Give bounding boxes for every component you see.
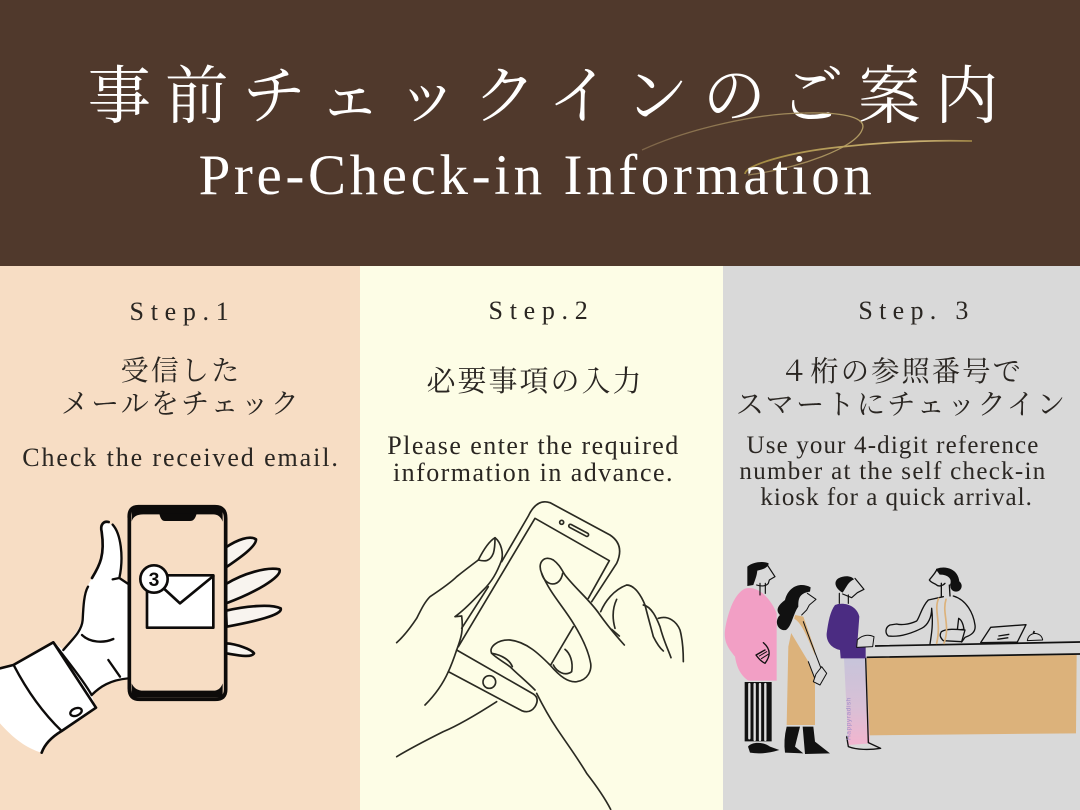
step 1 label: Step.1 (130, 297, 235, 326)
guest: woman in tan dress (777, 585, 830, 754)
header band (0, 0, 1080, 266)
step 3 Japanese heading (736, 349, 1067, 423)
step 3 label: Step. 3 (858, 296, 975, 325)
step 2 English text: information in advance. (393, 458, 674, 487)
title: Japanese: 事前チェックインのご案内 (88, 46, 1012, 137)
step 2 English text: Please enter the required (387, 431, 680, 460)
panel: step 1 (0, 266, 360, 810)
step 2 label: Step.2 (489, 296, 594, 325)
step 3 English text (739, 432, 1047, 511)
step 3 English text: number at the self check-in (739, 458, 1047, 485)
illustration: hands using smartphone line art (396, 501, 684, 810)
step 3 Japanese heading: スマートにチェックイン (736, 382, 1067, 423)
gold flourish (642, 112, 972, 176)
title: English: Pre-Check-in Information (199, 144, 875, 207)
laptop and desk bell (981, 625, 1043, 643)
step 2 English text (387, 431, 680, 487)
receptionist (886, 568, 975, 644)
reception counter (867, 642, 1080, 735)
panel: step 3 (723, 266, 1080, 810)
panel: step 2 (360, 266, 723, 810)
step 1 Japanese heading: メールをチェック (61, 382, 301, 422)
step 1 English text: Check the received email. (22, 443, 340, 472)
step 1 Japanese heading: 受信した (121, 349, 241, 389)
guest: man in purple (827, 576, 881, 749)
notification badge: 3 (149, 570, 160, 591)
notification badge (140, 565, 168, 593)
step 2 Japanese heading: 必要事項の入力 (426, 359, 644, 400)
step 3 English text: Use your 4-digit reference (746, 432, 1039, 459)
guest: man in pink (725, 562, 779, 753)
illustration: hand holding phone with email (0, 504, 282, 754)
illustration: guests at reception desk (724, 562, 1080, 754)
guest: man in purple: Happyradish (846, 697, 853, 740)
step 1 Japanese heading (61, 349, 301, 422)
step 3 Japanese heading: ４桁の参照番号で (780, 349, 1023, 390)
step 3 English text: kiosk for a quick arrival. (760, 484, 1033, 511)
